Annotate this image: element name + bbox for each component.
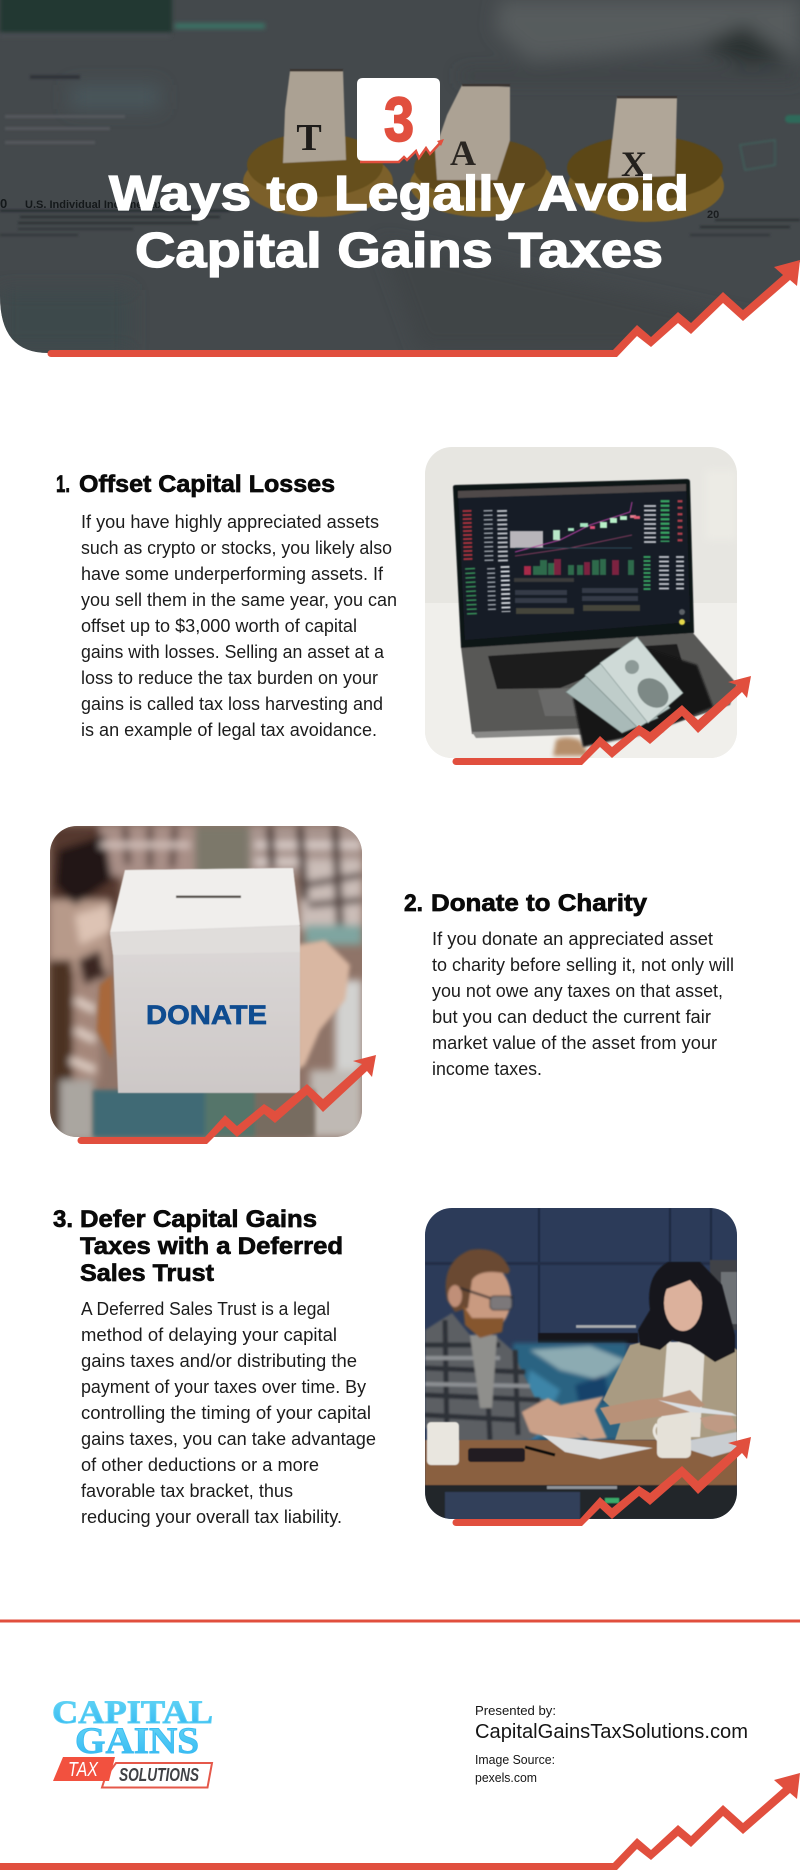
body 1: loss to reduce the tax burden on your <box>81 668 378 688</box>
heading 2: Donate to Charity <box>431 890 648 917</box>
footer credits: CapitalGainsTaxSolutions.com <box>475 1721 748 1743</box>
body 1: gains with losses. Selling an asset at a <box>81 642 385 662</box>
body 3: of other deductions or a more <box>81 1455 319 1475</box>
body 2: If you donate an appreciated asset <box>432 929 713 949</box>
footer credits: pexels.com <box>475 1770 537 1785</box>
badge: number 3 <box>357 78 444 162</box>
footer credits: Image Source: <box>475 1752 555 1767</box>
footer arrow <box>0 1773 800 1870</box>
body 3: method of delaying your capital <box>81 1325 337 1345</box>
section 3: deferred sales trust text <box>53 1206 376 1527</box>
photo: coins and letter blocks <box>243 69 724 222</box>
footer logo: TAX <box>68 1759 99 1781</box>
header banner photo: 20 <box>707 209 719 221</box>
heading 3: 3. <box>53 1206 73 1233</box>
man <box>425 1249 607 1445</box>
body 2: income taxes. <box>432 1059 542 1079</box>
body 2 <box>432 929 734 1079</box>
body 3: reducing your overall tax liability. <box>81 1507 342 1527</box>
section 2 photo: donate box <box>50 826 362 1140</box>
laptop trading screen <box>467 500 685 625</box>
header arrow <box>48 260 800 357</box>
section 3 arrow <box>453 1437 751 1526</box>
body 2: to charity before selling it, not only will <box>432 955 734 975</box>
footer credits: Presented by: <box>475 1703 556 1718</box>
body 3: payment of your taxes over time. By <box>81 1377 366 1397</box>
header banner photo: U.S. Individual Income Tax <box>25 199 164 211</box>
section 1: offset capital losses text <box>56 471 397 740</box>
heading 1: 1. <box>56 471 70 498</box>
body 1: have some underperforming assets. If <box>81 564 384 584</box>
section 1 photo: laptop and cash <box>425 447 737 758</box>
header banner photo: X <box>621 144 647 184</box>
header banner photo: T <box>296 117 322 159</box>
badge: number 3: 3 <box>384 86 414 155</box>
section 3 photo: couple at table <box>425 1208 737 1519</box>
heading 3: Sales Trust <box>80 1260 214 1287</box>
body 1: you sell them in the same year, you can <box>81 590 397 610</box>
header banner photo: A <box>450 133 476 173</box>
section 2 arrow <box>78 1055 376 1144</box>
woman <box>600 1262 737 1440</box>
body 3: controlling the timing of your capital <box>81 1403 371 1423</box>
body 3: gains taxes and/or distributing the <box>81 1351 357 1371</box>
heading 3 <box>53 1206 343 1287</box>
section 2 photo: donate box: DONATE <box>146 1000 267 1030</box>
footer logo: CAPITAL <box>52 1695 213 1731</box>
title: Ways to Legally Avoid <box>109 167 689 221</box>
footer logo: GAINS <box>75 1721 199 1762</box>
title <box>109 167 689 278</box>
title: Capital Gains Taxes <box>135 224 663 278</box>
body 1: gains is called tax loss harvesting and <box>81 694 383 714</box>
backsplash <box>513 1343 627 1440</box>
heading 3: Taxes with a Deferred <box>80 1233 343 1260</box>
body 1 <box>81 512 397 740</box>
body 1: If you have highly appreciated assets <box>81 512 379 532</box>
body 2: market value of the asset from your <box>432 1033 717 1053</box>
heading 3: Defer Capital Gains <box>80 1206 317 1233</box>
footer logo <box>52 1695 213 1788</box>
body 3: favorable tax bracket, thus <box>81 1481 293 1501</box>
section 2: donate to charity text <box>404 890 734 1079</box>
section 1 arrow <box>453 676 751 765</box>
footer divider <box>0 1620 800 1622</box>
footer credits <box>475 1703 748 1785</box>
body 1: is an example of legal tax avoidance. <box>81 720 377 740</box>
body 1: offset up to $3,000 worth of capital <box>81 616 357 636</box>
heading 1: Offset Capital Losses <box>79 471 335 498</box>
footer logo: SOLUTIONS <box>119 1765 199 1785</box>
header banner photo: 0 <box>0 196 7 211</box>
body 3 <box>81 1299 376 1527</box>
body 3: A Deferred Sales Trust is a legal <box>81 1299 330 1319</box>
cash <box>566 637 683 733</box>
body 1: such as crypto or stocks, you likely also <box>81 538 392 558</box>
heading 2: 2. <box>404 890 423 917</box>
table <box>425 1417 737 1519</box>
header banner photo <box>0 0 800 360</box>
body 2: you not owe any taxes on that asset, <box>432 981 723 1001</box>
body 3: gains taxes, you can take advantage <box>81 1429 376 1449</box>
body 2: but you can deduct the current fair <box>432 1007 711 1027</box>
